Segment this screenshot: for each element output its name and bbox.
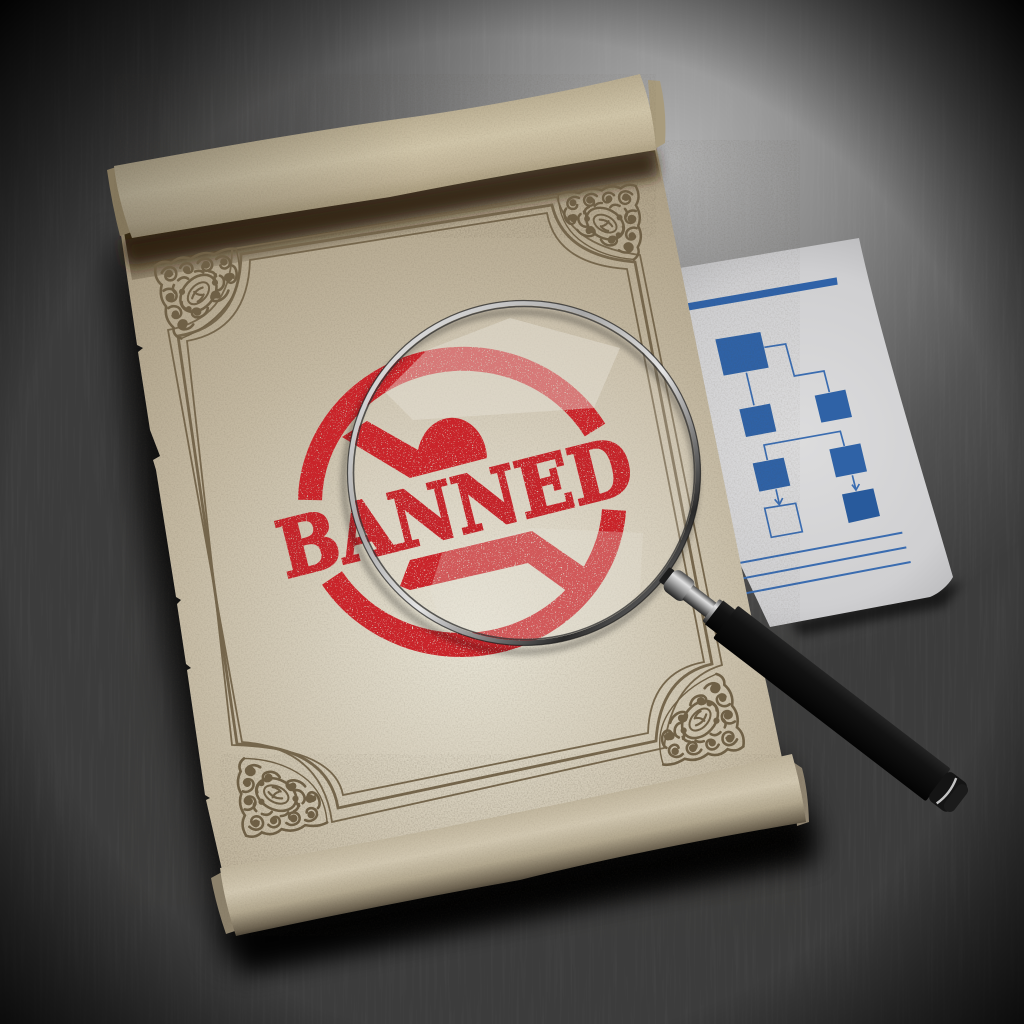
end cap — [927, 770, 969, 814]
panel: parchment scroll — [108, 140, 815, 960]
roller right end — [790, 760, 809, 826]
lens highlights — [385, 318, 643, 650]
roller left end — [211, 872, 238, 934]
handle — [651, 558, 973, 818]
ornamental frame — [168, 197, 722, 822]
panel: blue flowchart document — [680, 238, 962, 636]
scroll cast shadow — [108, 235, 815, 960]
bottom roller — [211, 754, 815, 975]
banned stamp — [269, 359, 642, 645]
shadow beneath bottom roller — [232, 815, 815, 975]
middle frame line — [178, 205, 712, 808]
corner ornament bottom right — [649, 671, 746, 766]
corner ornament top right — [557, 181, 648, 270]
top roller — [107, 74, 665, 238]
parchment sheet — [120, 140, 800, 905]
text rules — [739, 533, 911, 593]
connector lines — [746, 344, 859, 505]
ferrule — [659, 567, 675, 585]
magnifying glass — [344, 300, 973, 818]
stamp word: BANNED — [269, 421, 642, 596]
lens tint — [353, 306, 695, 640]
glass shadow — [344, 312, 696, 652]
title bar — [687, 277, 838, 311]
roller left end — [107, 167, 132, 236]
stamp ring segments — [310, 359, 614, 645]
flowchart graphics — [687, 277, 911, 593]
inner frame line — [187, 213, 704, 795]
roller right end — [648, 80, 665, 150]
outer frame line — [168, 197, 722, 822]
corner ornament top left — [153, 248, 249, 341]
stamp figure — [342, 418, 487, 478]
roller body — [114, 74, 656, 238]
flowchart boxes — [715, 332, 880, 537]
shadow beneath top roller — [122, 146, 664, 280]
roller body — [220, 754, 806, 936]
corner ornament bottom left — [229, 744, 328, 841]
black grip — [713, 606, 951, 801]
lens rim — [350, 303, 698, 643]
